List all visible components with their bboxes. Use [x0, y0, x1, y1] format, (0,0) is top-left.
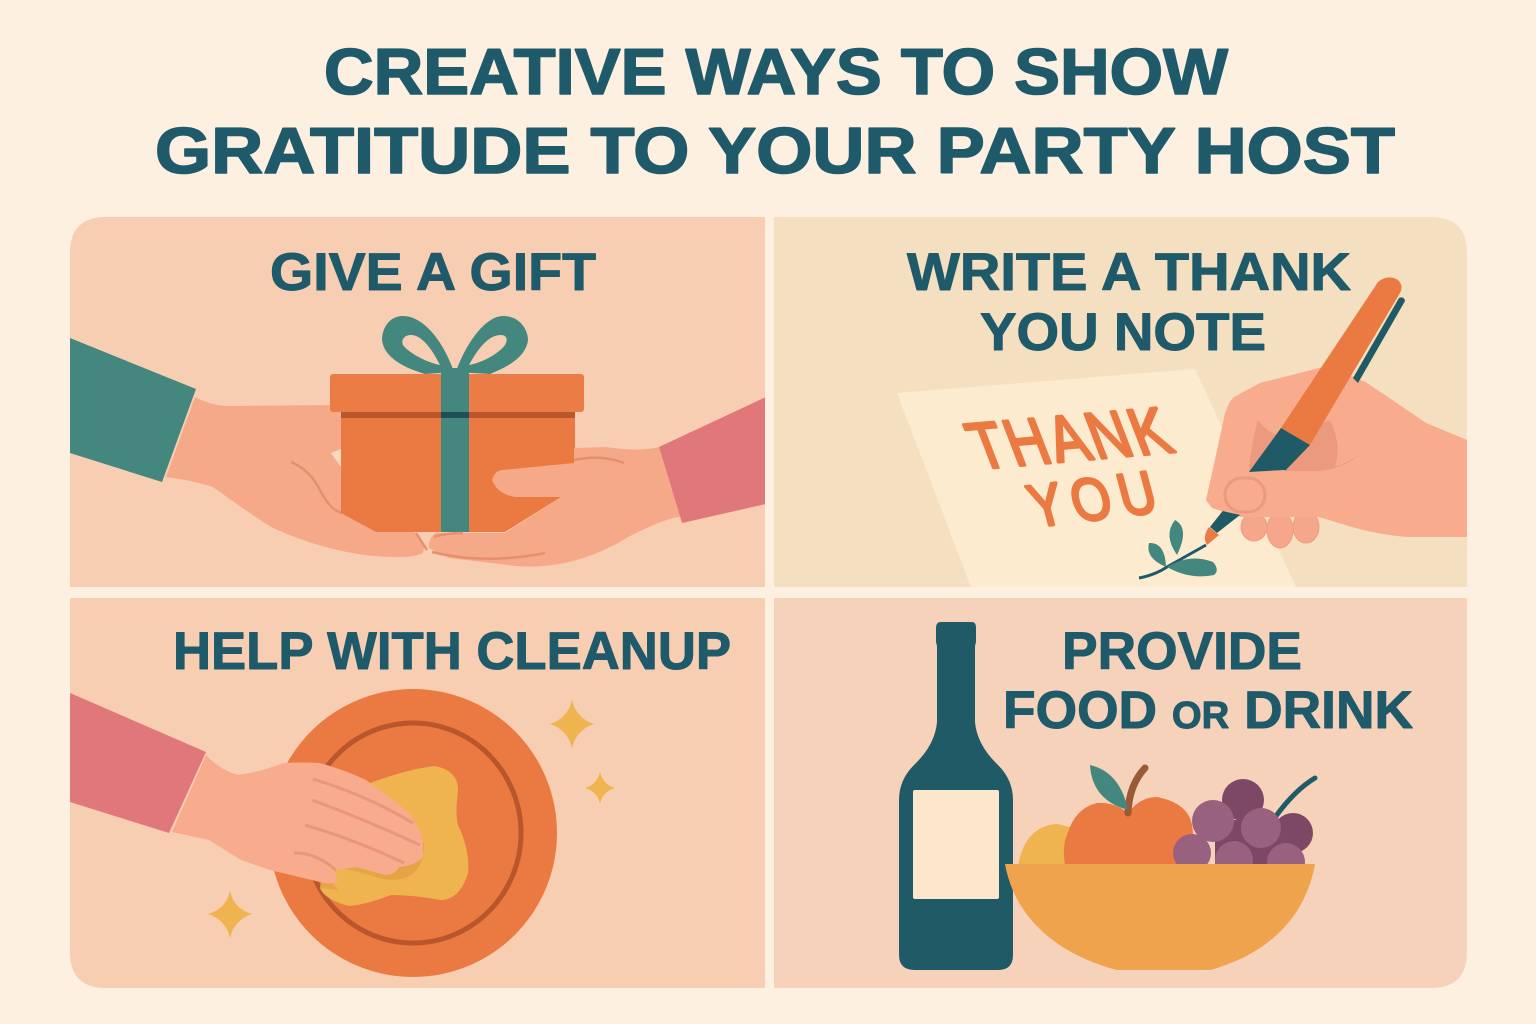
heading: write a thank you note: WRITE A THANK	[907, 243, 1351, 302]
heading: provide food or drink	[1006, 632, 1413, 729]
title: GRATITUDE TO YOUR PARTY HOST	[155, 114, 1395, 187]
panel: help with cleanup	[70, 598, 765, 988]
icon: left hand	[166, 397, 424, 557]
handwritten text	[962, 406, 1178, 527]
handwritten text: YOU	[1021, 459, 1163, 540]
icon: thumb	[1212, 470, 1286, 515]
panel: provide food or drink	[774, 598, 1467, 988]
icon: sleeve	[70, 693, 206, 833]
heading: help with cleanup: HELP WITH CLEANUP	[173, 622, 731, 681]
handwritten text: THANK	[957, 395, 1182, 483]
icon: plate	[269, 689, 557, 977]
icon: sponge	[320, 766, 468, 906]
heading: write a thank you note: YOU NOTE	[980, 303, 1266, 362]
panel: give a gift	[70, 217, 766, 587]
heading: write a thank you note	[906, 252, 1351, 351]
icon: gift box	[330, 316, 584, 532]
icon: fingers	[1240, 517, 1320, 548]
icon: writing hand	[1206, 367, 1467, 537]
icon: wine bottle	[899, 622, 1013, 970]
icon: pen	[1205, 277, 1405, 545]
icon: left sleeve	[70, 338, 196, 482]
icon: leaf sprig	[1139, 520, 1217, 578]
icon: sparkles	[208, 700, 615, 938]
icon: fruit bowl	[1005, 765, 1315, 970]
hand shadow	[1249, 420, 1362, 471]
title	[155, 35, 1395, 187]
heading: provide food or drink: PROVIDE	[1062, 622, 1302, 681]
title: CREATIVE WAYS TO SHOW	[324, 35, 1229, 108]
panel: write a thank you note	[774, 217, 1467, 587]
heading: give a gift: GIVE A GIFT	[270, 243, 596, 302]
heading: provide food or drink: FOOD OR DRINK	[1003, 681, 1413, 740]
note paper	[897, 369, 1296, 587]
icon: right hand	[416, 447, 680, 567]
icon: cleaning hand	[172, 755, 423, 884]
icon: right sleeve	[659, 397, 766, 523]
